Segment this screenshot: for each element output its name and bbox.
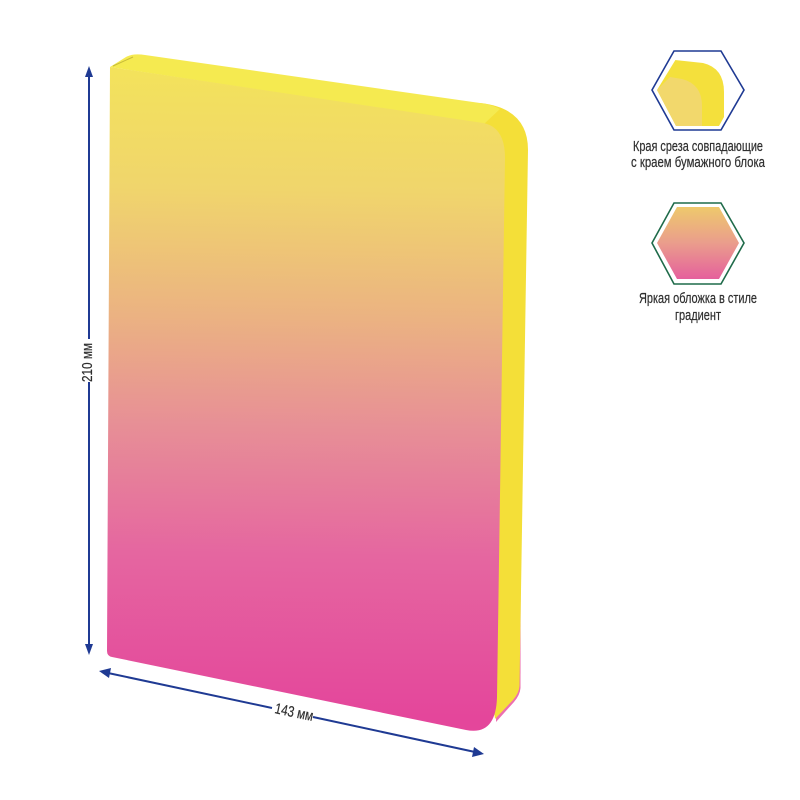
gradient caption: градиент (675, 308, 721, 324)
feature: edges (631, 51, 767, 171)
notebook page block side (480, 103, 528, 719)
feature: gradient cover (639, 203, 761, 324)
notebook pink edge (496, 300, 521, 722)
edge caption: с краем бумажного блока (631, 155, 766, 171)
height label: 210 мм (79, 343, 96, 382)
icon: edge hexagon (650, 51, 744, 130)
width label: 143 мм (273, 700, 315, 725)
width dimension arrow (99, 668, 484, 757)
icon: gradient hexagon (652, 203, 744, 284)
notebook top face (110, 54, 500, 124)
gradient caption: Яркая обложка в стиле (639, 291, 757, 307)
notebook front cover (107, 67, 505, 731)
top corner seam (113, 57, 133, 66)
height dimension arrow (79, 66, 96, 655)
notebook (107, 54, 528, 731)
